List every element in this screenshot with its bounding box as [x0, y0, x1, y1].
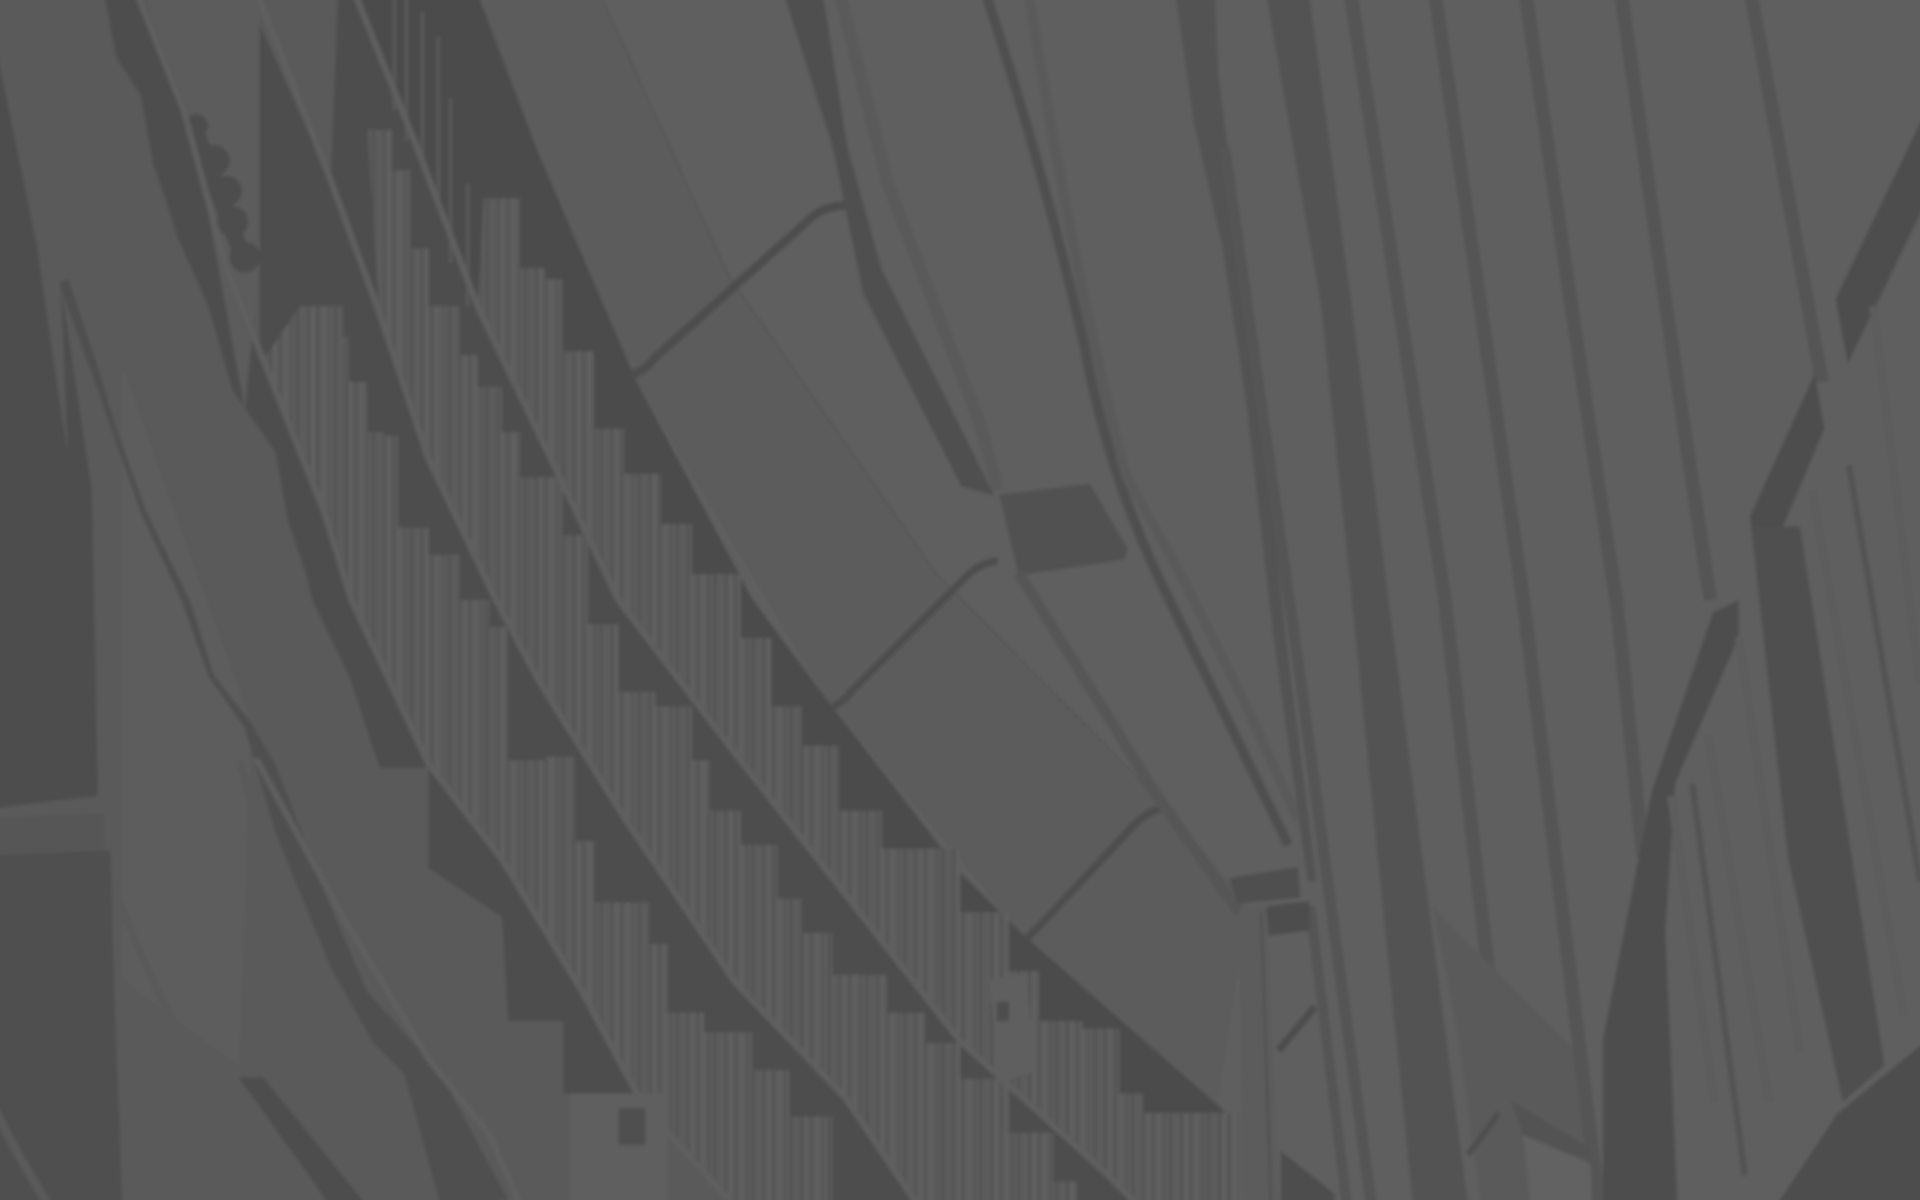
low dark wedge	[1281, 1151, 1335, 1200]
vertical shelf stripes	[1224, 0, 1822, 1200]
dark triangle above pale lower panel	[1511, 1101, 1592, 1163]
horizontal dark bracket upper	[1229, 867, 1300, 904]
right lattice dark piece upper	[1836, 110, 1920, 364]
pale companion arc	[1029, 0, 1298, 820]
pale vertical post	[1239, 906, 1278, 1200]
lower right panel tone	[1433, 906, 1592, 1200]
thin dark window arc	[986, 0, 1288, 845]
lower rib continuing from block	[1019, 573, 1239, 912]
lower diagonal strut right	[1468, 1113, 1499, 1155]
dark shelf band b to c	[331, 0, 1139, 1200]
label glyph	[997, 1002, 1009, 1021]
lower ribbon shadow near left shelves	[239, 1078, 367, 1200]
book card with picture on lowest shelf	[569, 1093, 667, 1200]
bottom right dark corner	[1776, 1041, 1920, 1200]
curved ceiling panels, darker left section	[475, 0, 1248, 1104]
dark shelf band: scalloped gap above lip a	[104, 0, 637, 1093]
dark main shelf band	[355, 0, 1239, 1200]
lower left curved book edges	[0, 759, 392, 1200]
picture on book card	[618, 1108, 645, 1145]
band between lower lip and shelf a: thin scalloped shadow	[59, 279, 508, 1200]
scalloped shadow on upper books	[185, 115, 260, 272]
pale shelf plank at far left	[0, 813, 104, 855]
row of books on shelf b	[367, 130, 1078, 1200]
horizontal dark bracket lower	[1266, 901, 1310, 936]
strut one	[632, 206, 845, 375]
thick dark ceiling rib	[784, 0, 994, 496]
far-left book mass	[0, 0, 735, 1200]
right lattice dark piece middle	[1750, 373, 1824, 600]
dark block at lower left	[0, 850, 122, 1200]
diagonal strut behind post	[1278, 1007, 1315, 1051]
light shelf lips	[137, 0, 1139, 1200]
faint panel seam	[600, 0, 1156, 796]
thin pale book slivers in the top of the main shelf band	[394, 0, 468, 306]
post dark inner line	[1261, 912, 1271, 1200]
large pale foreground book	[122, 367, 251, 1065]
row of books on shelf c	[478, 198, 1239, 1200]
central junction block	[999, 484, 1128, 576]
strut two	[833, 561, 998, 707]
upper pale books above lip a	[144, 0, 260, 410]
pale label card on right shelf	[989, 973, 1036, 1082]
lower dark stripes among right books	[1692, 465, 1920, 1176]
strut three	[1026, 808, 1161, 939]
thick central column	[1266, 0, 1468, 1200]
pale lower panel	[1523, 1135, 1592, 1200]
pale rib edge	[840, 0, 998, 490]
right pale book strips	[1671, 306, 1920, 1102]
right dark diagonal	[1603, 600, 1739, 1200]
dark shelf band a to b	[260, 24, 918, 1200]
column one, thick top	[1176, 0, 1316, 882]
right dark column	[1751, 527, 1884, 1102]
left dark shadow wedge	[0, 37, 98, 808]
row of books on shelf a	[263, 306, 833, 1200]
